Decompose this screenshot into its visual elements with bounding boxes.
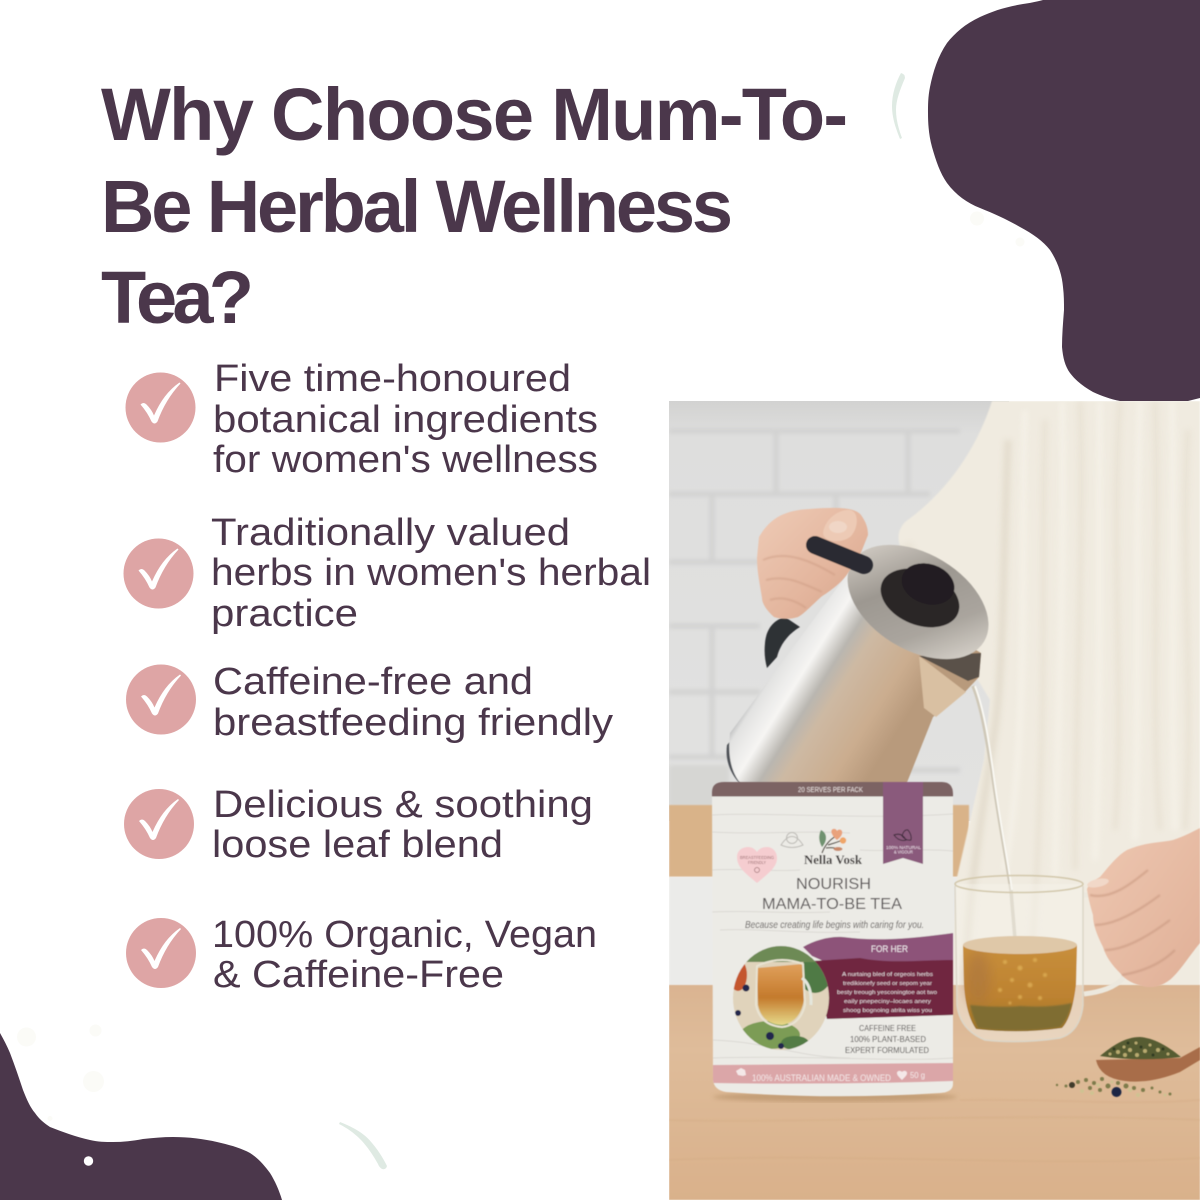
maroon text panel [812,958,953,1019]
icon: check circle 2 [124,538,194,608]
benefit 4 text: loose leaf blend [212,824,503,866]
pouch description: tredikionefy seed or sepom year [843,981,932,987]
ribbon tag [883,782,923,864]
benefit 4 [124,784,593,866]
decorative green stroke: bottom [339,1122,387,1169]
pouch bottom band text: 100% AUSTRALIAN MADE & OWNED [752,1073,891,1083]
benefit 5 [126,914,597,996]
decorative green stroke: top [892,73,905,139]
title: Why Choose Mum-To- [101,73,848,156]
kitchen wall tiles [669,401,1009,989]
logo flower [819,829,846,853]
pouch top band [712,782,953,796]
tea photo circle on pouch [729,944,831,1054]
mug outline [955,886,1083,1042]
benefit 2 [124,512,651,635]
pouch brand name: Nella Vosk [804,852,863,867]
tea speckles [998,958,1047,1004]
product pouch: & VIGOUR [894,850,914,854]
benefit 3 [126,661,613,744]
pouch description: besty treough yesconingtoe aot two [837,990,937,996]
benefit 5 text: 100% Organic, Vegan [212,914,597,956]
product pouch [712,782,953,1098]
heart badge: FRIENDLY [748,860,766,865]
black handle grip [815,545,864,565]
juniper berry [1112,1087,1122,1097]
hand gripping kettle handle [757,508,868,619]
seal outline [781,832,803,848]
kettle body [729,573,981,785]
benefit 5 text: & Caffeine-Free [213,954,504,996]
benefit 1 text: Five time-honoured [214,358,571,400]
photo: kettle pouring tea beside product pouch [669,401,1200,1200]
ribbon tag leaf icon [894,830,911,840]
table top [669,985,1200,1200]
title: Tea? [101,256,254,339]
background blob: top right [928,0,1200,401]
pouch description: eaily pnepeciny–locaes anery [844,999,931,1005]
scattered loose tea leaves [1056,1077,1172,1097]
benefit 4 text [212,784,593,866]
kettle spout [919,656,966,717]
pouch description: A nurtaing bled of orgeois herbs [842,972,933,978]
product pouch: MAMA-TO-BE TEA [762,896,903,913]
benefit 3 text [213,661,613,744]
benefit 1 text: for women's wellness [213,439,598,481]
water stream [973,686,1015,940]
pouch description: shoog bognoing atrita wiss you [843,1008,932,1014]
pouch for her label: FOR HER [871,944,908,955]
decorative white dot on blob [84,1156,93,1166]
benefit 2 text: Traditionally valued [211,512,570,554]
pouch feature list: CAFFEINE FREE [859,1023,916,1033]
pouch bottom band text: 50 g [910,1070,925,1080]
tea liquid [963,945,1077,1031]
linen shirt [898,401,1200,990]
kettle [726,544,989,782]
pouch bottom band [712,1063,953,1084]
benefit 5 text [212,914,597,996]
benefit 3 text: breastfeeding friendly [213,702,613,744]
kettle lid [847,544,989,660]
icon: check circle 4 [124,789,194,859]
heart badge: BREASTFEEDING [740,855,774,860]
mug handle [1083,984,1120,997]
pouch feature list [845,1023,929,1055]
pouch wood grain [712,814,953,1059]
pouch top band label: 20 SERVES PER FACK [798,787,863,794]
benefit 2 text [211,512,651,635]
fingernail [1087,878,1109,888]
heart badge [737,847,777,883]
purple brush banner [803,933,953,964]
pouch description [837,972,937,1014]
background blob: bottom left [0,1033,282,1200]
kettle knob [880,568,960,628]
pouch shadow [713,1092,957,1102]
benefit 1 [126,358,598,481]
kettle lower handle [765,617,800,668]
benefit 1 text: botanical ingredients [213,399,598,441]
pouch feature list: EXPERT FORMULATED [845,1045,929,1055]
hand holding mug [1086,828,1200,987]
icon: check circle 5 [126,918,196,988]
benefit 3 text: Caffeine-free and [213,661,533,703]
thumb [823,510,857,541]
mug rim [955,876,1083,892]
benefit 1 text [213,358,598,481]
tea foam [963,936,1077,954]
product pouch: 100% NATURAL [886,845,922,850]
pouch product name: NOURISH [796,876,871,893]
icon: check circle 3 [126,664,196,734]
settled leaves [970,1003,1072,1030]
kettle base rim [726,742,740,782]
pouch tagline: Because creating life begins with caring for you. [745,920,924,931]
benefit 4 text: Delicious & soothing [213,784,593,826]
title: Be Herbal Wellness [101,165,733,248]
icon: check circle 1 [126,372,196,442]
pouch body [712,782,953,1098]
counter and cabinet [669,805,969,877]
pouch bottom band text [736,1068,925,1083]
glass mug with tea [955,876,1124,1042]
benefit 2 text: herbs in women's herbal [211,552,651,594]
benefit 2 text: practice [211,593,358,635]
wooden spoon with loose leaf tea [1096,1037,1200,1082]
title [101,73,848,339]
pouch feature list: 100% PLANT-BASED [850,1034,926,1044]
faint decorative dots [17,212,1024,1121]
